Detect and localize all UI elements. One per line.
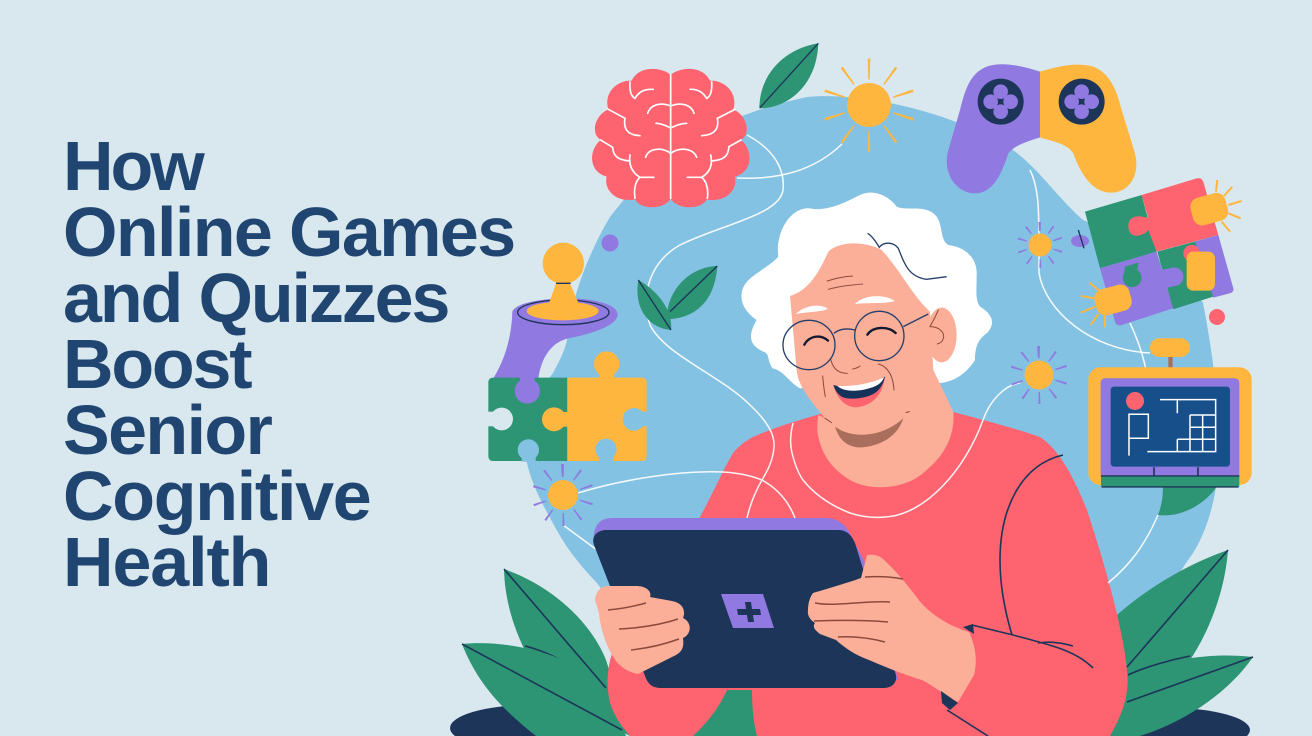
title: Boost — [63, 325, 252, 403]
coral dot — [1209, 309, 1225, 325]
plant leaves: right — [1110, 550, 1253, 736]
plus button — [721, 594, 774, 628]
left hand — [595, 586, 690, 674]
icon: game pawn on purple stand — [493, 243, 618, 378]
plant leaves: left — [462, 569, 630, 736]
icon: green and yellow jigsaw puzzle — [483, 351, 647, 462]
icon: tilted jigsaw puzzle — [1071, 178, 1242, 327]
face and neck — [783, 233, 957, 487]
sleeve cuff and seams — [941, 455, 1100, 736]
title: How — [63, 127, 205, 205]
blue background circle — [525, 96, 1218, 700]
tablet — [593, 518, 898, 688]
icon: top sun — [833, 69, 905, 141]
glasses — [783, 311, 928, 370]
title — [63, 127, 515, 601]
icon: purple rayed sun — [1022, 226, 1058, 264]
small leaf under monitor — [1158, 485, 1218, 515]
title: Cognitive — [63, 457, 370, 535]
wrinkles — [823, 276, 944, 423]
purple dot — [602, 234, 618, 252]
grandmother — [741, 193, 992, 487]
icon: pair of leaves — [637, 266, 717, 330]
title: Senior — [63, 391, 273, 469]
title: Online Games — [63, 193, 515, 271]
icon: top leaf — [759, 43, 818, 108]
title: and Quizzes — [63, 259, 448, 337]
connecting lines — [563, 135, 1158, 583]
ground shadows — [450, 705, 1250, 736]
sweater — [608, 412, 1128, 736]
icon: purple rayed sun — [1016, 352, 1062, 398]
icon: game controller — [947, 64, 1136, 193]
right hand — [808, 555, 976, 702]
mouth — [833, 377, 885, 407]
icon: purple rayed sun — [538, 470, 588, 520]
eyes — [804, 328, 896, 345]
icon: brain — [592, 69, 750, 207]
hair strand — [868, 233, 947, 279]
icon: retro monitor with maze — [1088, 338, 1252, 487]
center leaf behind sweater — [680, 685, 760, 736]
title: Health — [63, 523, 270, 601]
hair — [741, 193, 992, 388]
eyebrows — [796, 296, 895, 314]
